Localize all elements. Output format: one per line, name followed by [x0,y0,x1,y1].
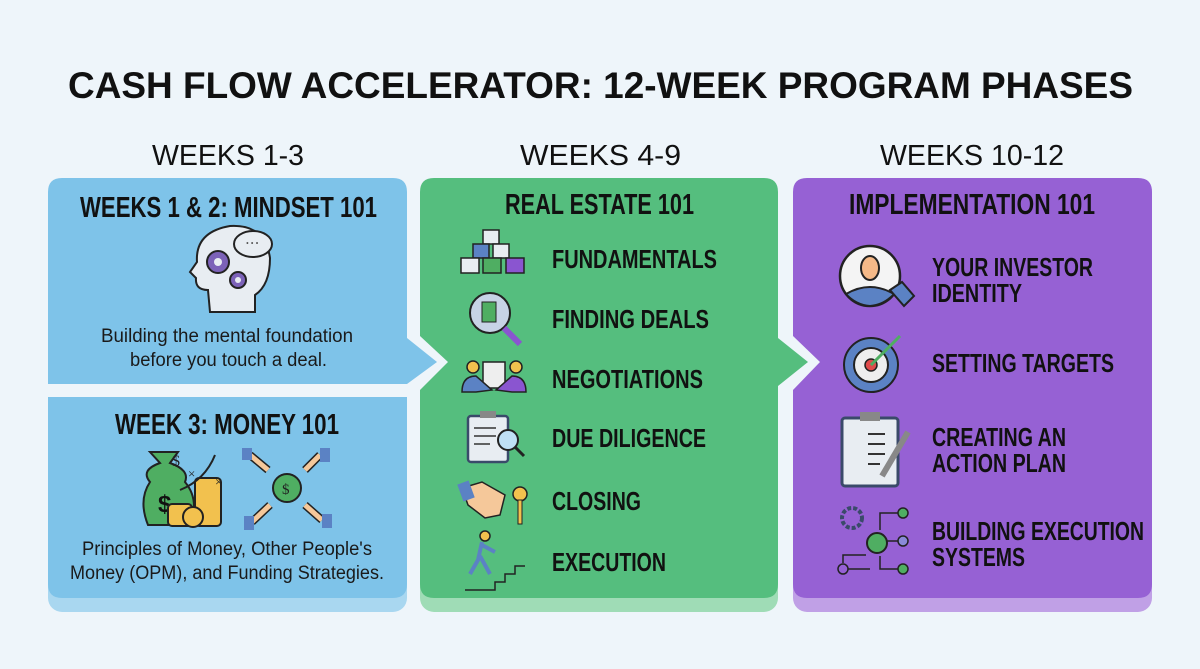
item: due diligence: DUE DILIGENCE [552,423,706,453]
item: execution systems [838,508,1144,574]
icon: money bag and coins: $ [172,453,180,470]
heading: mindset: WEEKS 1 & 2: MINDSET 101 [80,192,377,224]
item: finding deals: FINDING DEALS [552,304,709,334]
item: action plan: CREATING AN [932,422,1066,452]
item: setting targets: SETTING TARGETS [932,348,1114,378]
column label: weeks 4-9: WEEKS 4-9 [520,140,681,172]
icon: money bag and coins: × [188,466,195,481]
text: money description: Money (OPM), and Funding Strategies. [70,563,384,584]
item: closing [457,480,641,524]
item: investor identity: IDENTITY [932,278,1022,308]
icon: money bag and coins: $ [158,491,172,518]
item: negotiations: NEGOTIATIONS [552,364,703,394]
item: action plan [842,412,1066,486]
icon: head with gears: • • • [246,239,259,248]
text: money description: Principles of Money, Other People's [82,539,372,560]
heading: implementation: IMPLEMENTATION 101 [849,189,1095,221]
panel: real estate 101 [420,178,808,612]
item: due diligence [468,411,706,462]
text: money description [70,539,384,584]
item: finding deals [470,293,709,344]
item: execution systems: SYSTEMS [932,542,1025,572]
icon: hands passing money [242,448,332,530]
title: CASH FLOW ACCELERATOR: 12-WEEK PROGRAM PHASES [68,65,1133,106]
item: closing: CLOSING [552,486,641,516]
item: negotiations [462,361,703,394]
item: fundamentals: FUNDAMENTALS [552,244,717,274]
item: action plan: ACTION PLAN [932,448,1066,478]
panel: mindset 101 [48,178,437,396]
text: mindset description: before you touch a deal. [130,350,327,371]
column label: weeks 1-3: WEEKS 1-3 [152,140,304,172]
item: execution [465,531,666,590]
text: mindset description: Building the mental foundation [101,326,353,347]
heading: real estate: REAL ESTATE 101 [505,189,694,221]
icon: money bag and coins: × [215,474,222,489]
icon: head with gears [190,226,272,312]
item: setting targets [844,336,1114,392]
column label: weeks 10-12: WEEKS 10-12 [880,140,1064,172]
item: execution: EXECUTION [552,547,666,577]
icon: money bag and coins [143,452,222,527]
panel: money 101 [48,397,407,612]
item: investor identity [840,246,1093,308]
item: investor identity: YOUR INVESTOR [932,252,1093,282]
icon: hands passing money: $ [282,482,290,498]
text: mindset description [101,326,353,371]
panel: implementation 101 [793,178,1152,612]
item: fundamentals [461,230,717,274]
heading: money: WEEK 3: MONEY 101 [115,409,339,441]
